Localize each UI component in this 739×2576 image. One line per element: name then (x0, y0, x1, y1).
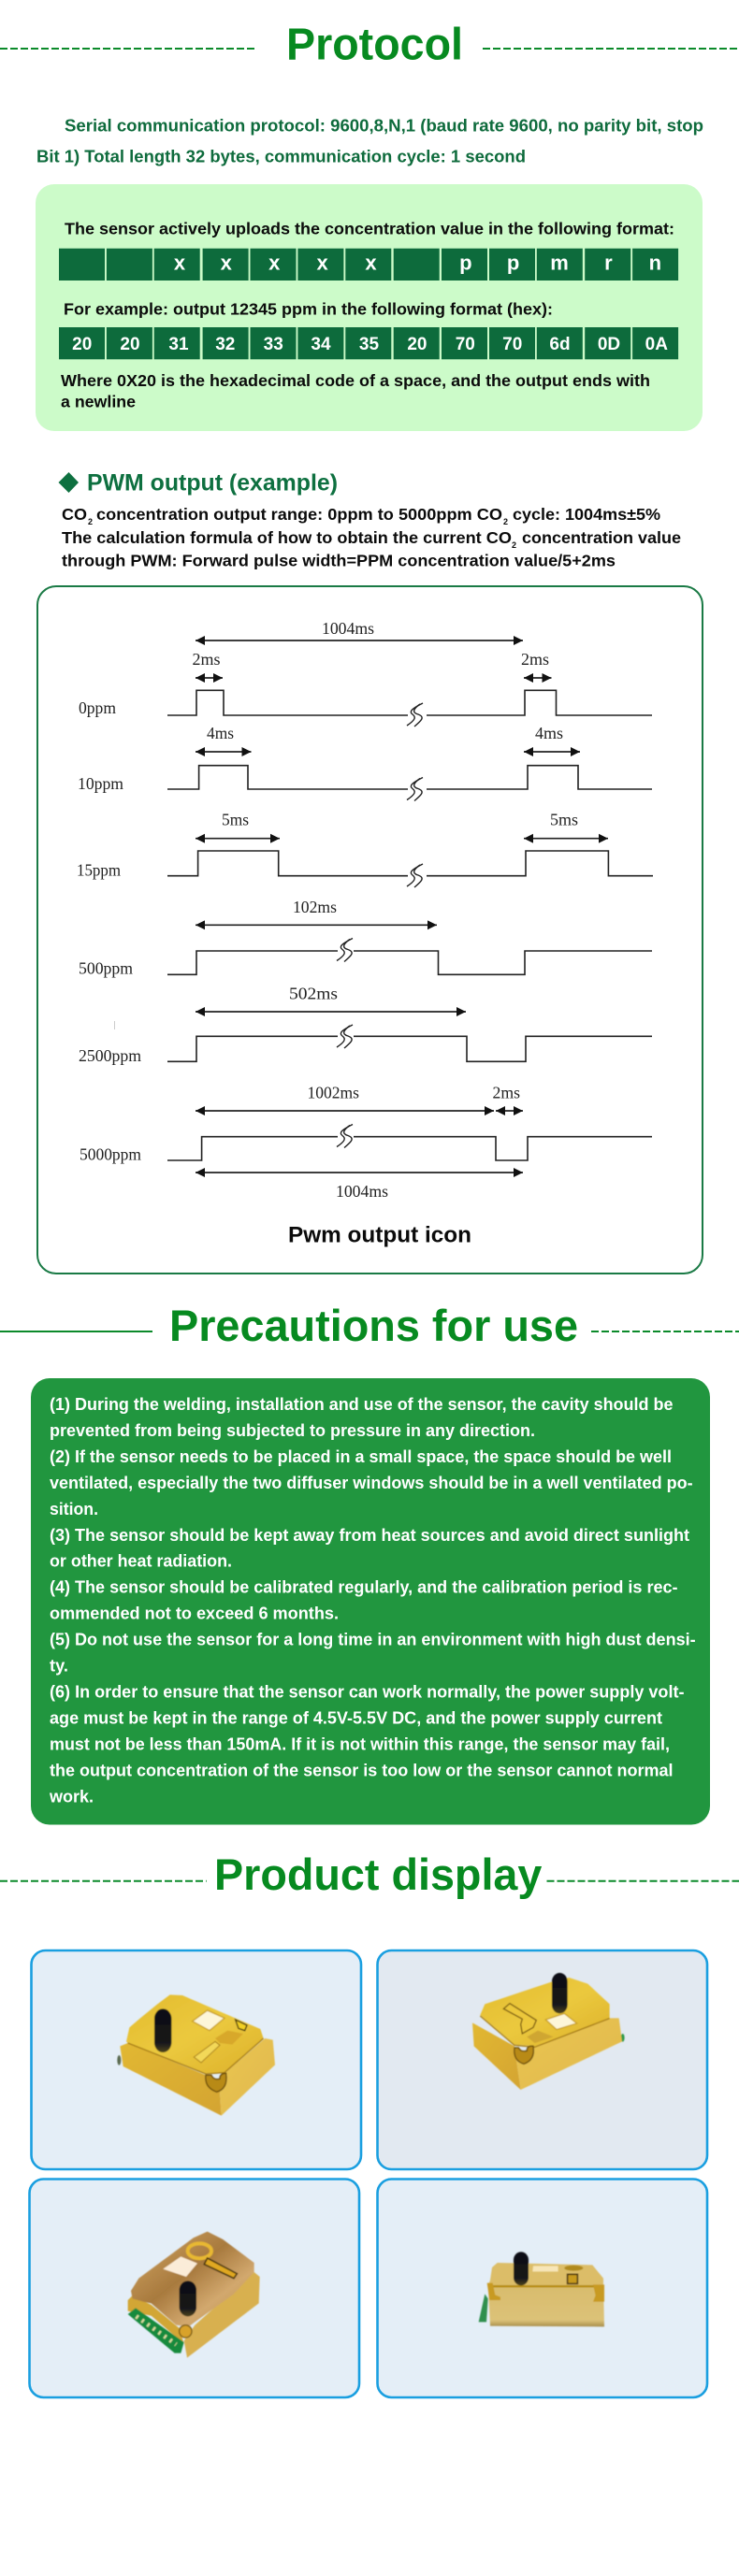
section header: Protocol: Protocol (286, 21, 463, 69)
text block: PWM description: concentration value (522, 528, 681, 547)
hex table row: 70 (456, 335, 475, 354)
format table row (59, 249, 678, 281)
format table row: p (459, 252, 472, 275)
text block: serial protocol description: Bit 1) Total length 32 bytes, communication cycle: 1 second (36, 148, 526, 166)
icon: gold sensor, angled left (117, 1994, 275, 2116)
section header: Product display: Product display (214, 1849, 542, 1899)
precaution 3: (3) The sensor should be kept away from heat sources and avoid direct sunlight (50, 1526, 689, 1545)
format table row: x (268, 252, 281, 275)
precaution 6: the output concentration of the sensor is too low or the sensor cannot normal (50, 1762, 674, 1780)
hex table row: 6d (549, 335, 571, 354)
note on hex code: Where 0X20 is the hexadecimal code of a space, and the output ends with (61, 371, 650, 390)
precaution 3: or other heat radiation. (50, 1552, 232, 1571)
note on hex code (61, 371, 650, 411)
note on hex code: a newline (61, 393, 136, 411)
hex table row: 34 (311, 335, 331, 354)
text block: serial protocol description (36, 117, 703, 166)
section header: Precautions for use: Precautions for use (169, 1301, 578, 1350)
panel: product photo 2 (378, 1950, 707, 2169)
hex table row: 20 (72, 335, 92, 354)
precaution 6: work. (49, 1788, 94, 1806)
hex table row: 31 (168, 335, 189, 354)
format description: The sensor actively uploads the concentration value in the following format: (65, 220, 674, 238)
precaution 6: age must be kept in the range of 4.5V-5.5V DC, and the power supply current (50, 1709, 662, 1728)
format table row: x (316, 252, 328, 275)
format table row: x (365, 252, 377, 275)
timing row: 5000ppm: 1002ms (307, 1083, 359, 1101)
format table row: x (174, 252, 186, 275)
panel: precautions list (31, 1378, 710, 1825)
precaution 2 (50, 1447, 693, 1518)
text block: serial protocol description: Serial communication protocol: 9600,8,N,1 (baud rate 9600, no parity bit, stop (65, 117, 703, 136)
precaution 2: ventilated, especially the two diffuser windows should be in a well ventilated po- (50, 1474, 693, 1492)
timing row: 15ppm: 15ppm (77, 861, 121, 880)
text block: PWM description: cycle: 1004ms±5% (513, 505, 660, 524)
timing row: 5000ppm: 5000ppm (80, 1145, 141, 1164)
timing row: 5000ppm (80, 1083, 652, 1201)
timing row: 10ppm (78, 724, 652, 800)
timing row: 15ppm (77, 811, 653, 887)
timing row: 10ppm: 4ms (207, 724, 234, 742)
timing row: 5000ppm: 1004ms (336, 1182, 388, 1201)
hex table row: 0A (645, 335, 668, 354)
text block: PWM description (62, 505, 681, 570)
precaution 1: prevented from being subjected to pressure in any direction. (50, 1421, 535, 1440)
hex table row: 35 (359, 335, 379, 354)
timing row: 500ppm: 102ms (293, 898, 337, 916)
panel: upload format (36, 184, 703, 431)
panel: product photo 4 (378, 2179, 707, 2397)
format table row: x (221, 252, 233, 275)
hex table row (59, 327, 678, 359)
timing row: 0ppm: 0ppm (79, 698, 116, 717)
icon: sensor from above with green PCB (128, 2232, 260, 2358)
timing row: 2500ppm: 2500ppm (79, 1046, 141, 1065)
timing row: 0ppm: 2ms (193, 650, 221, 669)
precaution 5 (50, 1631, 696, 1676)
text block: PWM description: concentration output range: 0ppm to 5000ppm CO (96, 505, 502, 524)
format table row: r (604, 252, 613, 275)
timing row: 15ppm: 5ms (550, 811, 578, 829)
format table row: p (507, 252, 519, 275)
example description: For example: output 12345 ppm in the following format (hex): (64, 300, 553, 319)
text block: PWM description: through PWM: Forward pulse width=PPM concentration value/5+2ms (62, 552, 616, 570)
timing row: 0ppm: 2ms (521, 650, 549, 669)
precaution 6 (49, 1683, 685, 1806)
precaution 5: (5) Do not use the sensor for a long time in an environment with high dust densi- (50, 1631, 696, 1649)
timing row: 0ppm: 1004ms (322, 619, 374, 638)
text block: PWM description: The calculation formula of how to obtain the current CO (62, 528, 512, 547)
timing row: 500ppm: 500ppm (79, 959, 133, 978)
precaution 1: (1) During the welding, installation and use of the sensor, the cavity should be (50, 1395, 674, 1414)
precaution 3 (50, 1526, 689, 1571)
timing row: 15ppm: 5ms (222, 811, 249, 829)
panel: product photo 1 (32, 1950, 361, 2169)
diagram caption: Pwm output icon (288, 1222, 471, 1247)
hex table row: 20 (407, 335, 427, 354)
timing row: 10ppm: 10ppm (78, 774, 123, 793)
timing row: 0ppm (79, 619, 652, 727)
timing row: 2500ppm (79, 985, 652, 1065)
hex table row: 32 (215, 335, 235, 354)
text block: PWM description: 2 (88, 517, 93, 526)
hex table row: 70 (502, 335, 522, 354)
timing row: 2500ppm: 502ms (289, 985, 338, 1003)
icon: gold sensor, angled right (472, 1973, 625, 2090)
format table row: n (649, 252, 661, 275)
precaution 6: must not be less than 150mA. If it is not within this range, the sensor may fail, (50, 1735, 670, 1754)
timing row: 10ppm: 4ms (535, 724, 563, 742)
hex table row: 0D (598, 335, 620, 354)
precaution 4: ommended not to exceed 6 months. (50, 1605, 339, 1623)
hex table row: 33 (264, 335, 283, 354)
precaution 1 (50, 1395, 674, 1440)
text block: PWM description: CO (62, 505, 87, 524)
precaution 2: sition. (50, 1500, 98, 1518)
hex table row: 20 (120, 335, 140, 354)
precaution 4: (4) The sensor should be calibrated regularly, and the calibration period is rec- (50, 1578, 678, 1597)
precaution 5: ty. (50, 1657, 68, 1676)
timing row: 500ppm (79, 898, 652, 978)
panel: product photo 3 (30, 2179, 359, 2397)
heading: PWM output: PWM output (example) (87, 470, 338, 496)
precaution 6: (6) In order to ensure that the sensor can work normally, the power supply volt- (50, 1683, 685, 1702)
text block: PWM description: 2 (512, 540, 516, 550)
icon: diamond bullet (58, 472, 79, 493)
format table row: m (550, 252, 569, 275)
panel: PWM timing diagram (37, 586, 703, 1274)
icon: sensor from the side (479, 2252, 604, 2326)
timing row: 5000ppm: 2ms (492, 1083, 520, 1101)
precaution 4 (50, 1578, 678, 1623)
text block: PWM description: 2 (503, 517, 508, 526)
precaution 2: (2) If the sensor needs to be placed in a small space, the space should be well (50, 1447, 672, 1466)
